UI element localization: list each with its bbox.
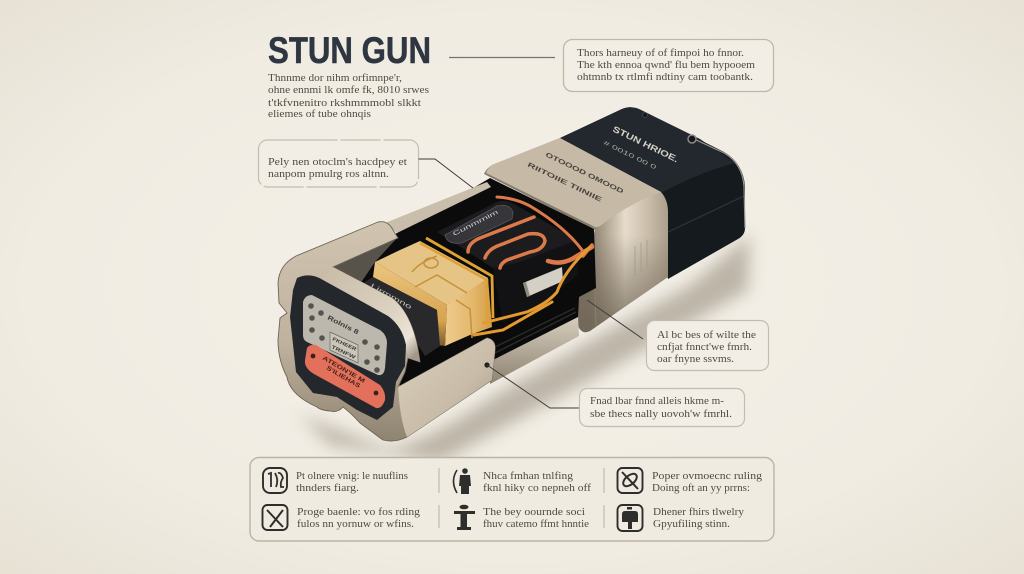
callout: top right <box>564 40 774 92</box>
callout: left: Pely nen otoclm's hacdpey et <box>268 156 407 168</box>
interior cavity <box>333 178 596 392</box>
red warning plate: ATEON'IE M <box>321 356 366 385</box>
text: tip three: Poper ovmoecnc ruling <box>652 470 763 482</box>
icon: figures <box>263 468 287 493</box>
callout: lower: Fnad lbar fnnd alleis hkme m- <box>590 395 724 407</box>
beige sleeve: OTOOOD OMOOD <box>544 152 625 196</box>
title: STUN GUN <box>268 30 431 71</box>
yellow wires <box>474 247 590 335</box>
leader lines <box>418 159 643 408</box>
callout: lower: sbe thecs nally uovoh'w fmrhl. <box>590 408 732 420</box>
beige sleeve: RIITOIIE TIINIIE <box>526 162 604 204</box>
black end cap: STUN HRIOE. <box>611 124 680 164</box>
intro text block: eliemes of tube ohnqis <box>268 108 371 120</box>
text: tip six <box>653 506 744 530</box>
text: tip four: fulos nn yornuw or wfins. <box>297 518 414 530</box>
text: tip five <box>483 506 589 530</box>
text: tip six: Dhener fhirs tlwelry <box>653 506 744 518</box>
orange wires <box>468 197 592 268</box>
text: tip four: Proge baenle: vo fos rding <box>297 506 421 518</box>
red warning plate: S'ILIEHAS <box>325 366 361 390</box>
text: tip three <box>652 470 763 494</box>
text: tip one <box>296 470 408 494</box>
intro text block: Thnnme dor nihm orfimnpe'r, <box>268 72 402 84</box>
module label <box>445 205 513 243</box>
battery pack <box>360 277 440 356</box>
floor rails <box>493 308 576 354</box>
text: tip two <box>483 470 591 494</box>
upper body wall <box>385 182 491 233</box>
icon: standing figure <box>454 505 475 530</box>
front dark panel <box>290 275 406 420</box>
black end cap <box>556 107 745 279</box>
callout: right: Al bc bes of wilte the <box>657 329 756 341</box>
grey control plate: Rolnis 8 <box>326 315 360 336</box>
grey control plate: TRNFW <box>330 344 357 361</box>
callout: left: nanpom pmulrg ros altnn. <box>268 168 389 180</box>
text: tip three: Doing oft an yy prrns: <box>652 482 750 494</box>
text: tip five: fhuv catemo ffmt hnntie <box>483 518 589 530</box>
callout: right <box>646 320 768 370</box>
silver block <box>523 267 563 297</box>
callout: top right: ohtmnb tx rtlmfi ndtiny cam toobantk. <box>577 71 753 83</box>
text: tip six: Gpyufiling stinn. <box>653 518 730 530</box>
callout: right: cnfjat fnnct'we fmrh. <box>657 341 752 353</box>
red warning plate <box>305 345 385 408</box>
lower body wall <box>490 316 579 384</box>
front housing bezel <box>278 222 495 441</box>
intro text block: ohne ennmi lk omfe fk, 8010 srwes <box>268 84 429 96</box>
grey control plate <box>303 295 387 375</box>
device: cutaway stun gun <box>278 107 745 441</box>
intro text block: t'tkfvnenitro rkshmmmobl slkkt <box>268 97 421 109</box>
callout: left <box>258 140 418 187</box>
upper bezel strip <box>322 267 420 362</box>
safety panel <box>250 458 774 541</box>
text: tip one: thnders fiarg. <box>296 482 359 494</box>
text: tip two: Nhca fmhan tnlfing <box>483 470 574 482</box>
callout: top right: Thors harneuy of of fimpoi ho fnnor. <box>577 47 744 59</box>
capacitor gold block <box>373 238 493 346</box>
callout: lower <box>580 388 744 426</box>
black end cap: # 0010 00 0 <box>602 140 658 172</box>
leader line: title to top callout <box>449 56 555 58</box>
intro text block <box>268 72 429 120</box>
device: shadow <box>300 235 750 462</box>
text: tip five: The bey oournde soci <box>483 506 585 518</box>
icon: no wire <box>618 468 642 493</box>
battery pack: Lirmmno <box>369 283 413 311</box>
grey control plate: FKHEER <box>331 336 358 353</box>
callout: right: oar fnyne ssvms. <box>657 353 734 365</box>
lower housing side <box>398 338 495 437</box>
control module <box>437 201 578 322</box>
beige sleeve <box>484 138 668 332</box>
icon: crossed box <box>262 505 288 530</box>
callout: top right: The kth ennoa qwnd' flu bem hypooem <box>577 59 755 71</box>
text: tip two: fknl hiky co nepneh off <box>483 482 591 494</box>
text: tip one: Pt olnere vnig: le nuuflins <box>296 470 408 482</box>
icon: mailbox <box>618 505 642 531</box>
module label: Cunmrnim <box>452 210 499 238</box>
text: tip four <box>297 506 421 530</box>
icon: person <box>454 468 471 494</box>
